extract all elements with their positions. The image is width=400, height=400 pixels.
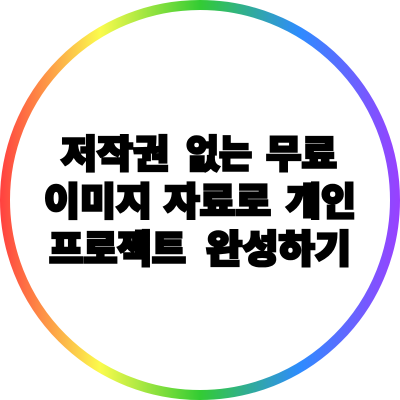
title line 2: 이미지 bbox=[44, 182, 152, 224]
title line 2: 자료로 bbox=[164, 182, 271, 224]
title line 3: 프로젝트 bbox=[49, 230, 186, 272]
title line 1 bbox=[61, 134, 337, 176]
title line 2: 개인 bbox=[286, 182, 356, 224]
title line 1: 무료 bbox=[266, 134, 337, 176]
title line 2 bbox=[44, 182, 356, 224]
title line 3 bbox=[49, 230, 351, 272]
title line 3: 완성하기 bbox=[206, 230, 351, 272]
title line 1: 저작권 bbox=[61, 134, 169, 176]
title bbox=[44, 134, 356, 272]
title line 1: 없는 bbox=[186, 134, 252, 176]
